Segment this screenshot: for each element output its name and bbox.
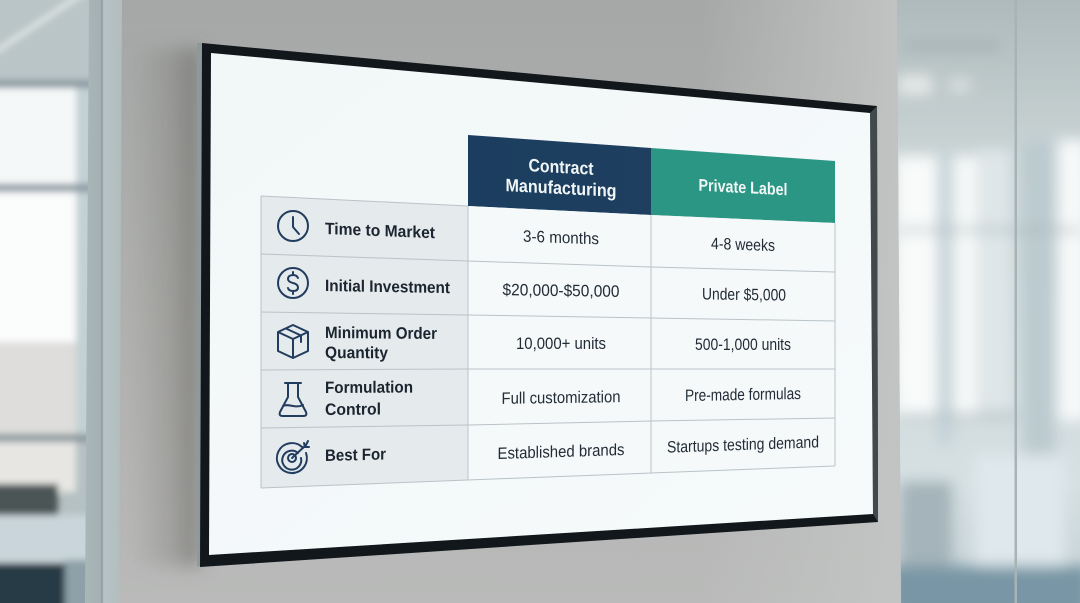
row: Formulation Control: [280, 379, 801, 419]
row: Formulation Control: Pre-made formulas: [685, 385, 801, 405]
row: Minimum Order Quantity: 500-1,000 units: [695, 336, 791, 354]
row: Time to Market: 4-8 weeks: [711, 235, 775, 255]
icon: dollar coin: [278, 268, 308, 298]
comparison table: [261, 135, 835, 488]
row: Formulation Control: Full customization: [502, 388, 620, 408]
row: Best For: Best For: [325, 445, 387, 465]
row: Best For: [277, 433, 819, 473]
value cells: [468, 206, 835, 480]
icon: box: [278, 325, 308, 358]
row: Initial Investment: [278, 268, 786, 305]
header cell: Contract Manufacturing: Contract: [529, 155, 593, 179]
row: Minimum Order Quantity: Quantity: [325, 344, 389, 362]
row label column: [261, 196, 468, 488]
row: Time to Market: Time to Market: [325, 220, 435, 242]
row: Formulation Control: Control: [325, 401, 381, 419]
icon: flask: [280, 383, 306, 416]
grid lines: [261, 196, 835, 488]
row: Time to Market: [278, 211, 775, 255]
row: Formulation Control: Formulation: [325, 379, 413, 397]
header cell: Private Label: Private Label: [698, 176, 788, 199]
screen: [209, 53, 873, 555]
row: Minimum Order Quantity: [278, 324, 791, 362]
icon: target with arrow: [277, 441, 309, 473]
shadow of monitor on wall: [128, 48, 200, 566]
glass door post: [85, 0, 122, 603]
row: Initial Investment: Initial Investment: [325, 277, 450, 297]
row: Best For: Established brands: [498, 441, 624, 463]
row: Time to Market: 3-6 months: [523, 228, 599, 248]
header cell: Contract Manufacturing: [468, 135, 651, 215]
header cell: Contract Manufacturing: Manufacturing: [505, 175, 617, 201]
right office background: [890, 0, 1080, 603]
row: Minimum Order Quantity: 10,000+ units: [516, 335, 606, 353]
row: Initial Investment: $20,000-$50,000: [502, 281, 620, 301]
header cell: Private Label: [651, 148, 835, 223]
left office background: [0, 0, 100, 603]
wall display monitor: [197, 43, 878, 567]
icon: clock: [278, 211, 308, 241]
row: Initial Investment: Under $5,000: [702, 285, 786, 305]
row: Minimum Order Quantity: Minimum Order: [325, 324, 438, 343]
wall: [85, 0, 901, 603]
row: Best For: Startups testing demand: [667, 433, 819, 457]
